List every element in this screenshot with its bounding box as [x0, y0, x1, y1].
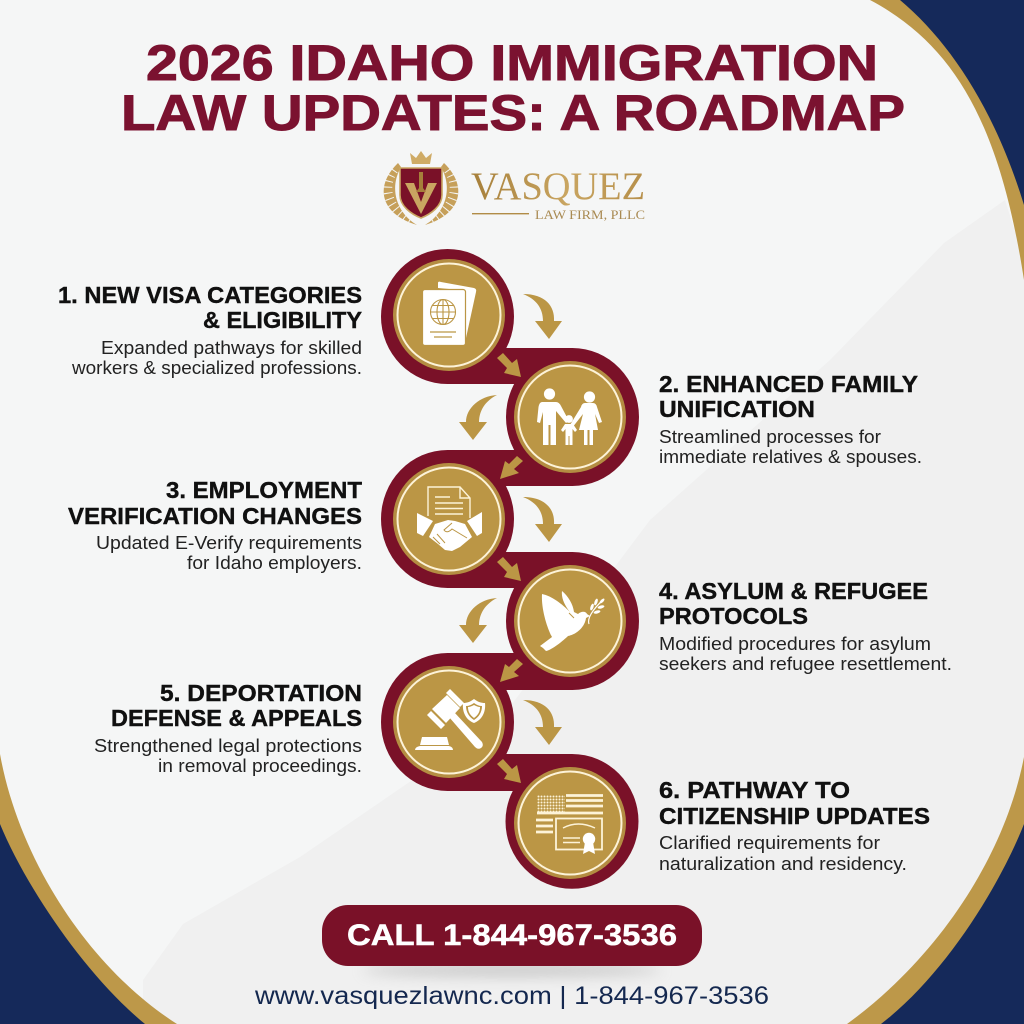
title: 2026 IDAHO IMMIGRATION [146, 34, 878, 91]
text block 4: 4. ASYLUM & REFUGEE [659, 578, 928, 604]
step 6 medallion: flag and certificate [514, 767, 626, 879]
text block 6 [659, 777, 930, 874]
step 3 medallion: document and handshake [393, 463, 505, 575]
text block 3: VERIFICATION CHANGES [68, 503, 362, 529]
text block 6: CITIZENSHIP UPDATES [659, 803, 930, 829]
text block 4: PROTOCOLS [659, 603, 808, 629]
text block 6: 6. PATHWAY TO [659, 777, 850, 803]
text block 4 [659, 578, 952, 674]
text block 2: immediate relatives & spouses. [659, 447, 922, 467]
text block 3: Updated E-Verify requirements [96, 533, 362, 553]
logo wordmark: VASQUEZ [471, 165, 645, 208]
text block 1: & ELIGIBILITY [203, 307, 362, 333]
arrow: curved right 2 [523, 497, 562, 542]
call to action button: CALL 1-844-967-3536 [347, 919, 677, 952]
step 2 medallion: family [514, 361, 626, 473]
text block 3 [68, 477, 363, 573]
button shadow [362, 964, 662, 976]
serpentine path [381, 249, 639, 889]
title: LAW UPDATES: A ROADMAP [121, 84, 905, 141]
arrow: curved left 1 [459, 395, 497, 440]
text block 1: 1. NEW VISA CATEGORIES [58, 282, 362, 308]
text block 2: Streamlined processes for [659, 427, 881, 447]
text block 2: 2. ENHANCED FAMILY [659, 371, 918, 397]
arrow: curved right 3 [523, 700, 562, 745]
step 4 medallion: dove [514, 565, 626, 677]
arrow: curved right 1 [523, 294, 562, 339]
text block 5 [94, 680, 362, 776]
text block 5: in removal proceedings. [158, 756, 362, 776]
text block 4: Modified procedures for asylum [659, 634, 931, 654]
step 5 medallion: gavel and shield [393, 666, 505, 778]
icon: shield [400, 168, 442, 218]
text block 3: 3. EMPLOYMENT [166, 477, 363, 503]
arrow: step 1 to 2 [497, 353, 521, 377]
title [121, 34, 905, 141]
text block 2: UNIFICATION [659, 396, 815, 422]
text block 5: Strengthened legal protections [94, 736, 362, 756]
logo: Vasquez Law Firm [384, 151, 645, 225]
arrows between steps [459, 294, 562, 783]
text block 3: for Idaho employers. [187, 553, 362, 573]
arrow: step 4 to 5 [500, 659, 523, 682]
call to action button [322, 905, 702, 966]
text block 5: 5. DEPORTATION [160, 680, 362, 706]
icon: crown [410, 151, 432, 164]
text block 6: Clarified requirements for [659, 833, 880, 853]
icon: laurel wreath [384, 163, 458, 225]
text block 6: naturalization and residency. [659, 854, 907, 874]
text block 1: Expanded pathways for skilled [101, 338, 362, 358]
text block 4: seekers and refugee resettlement. [659, 654, 952, 674]
arrow: curved left 2 [459, 598, 497, 643]
logo rule [472, 213, 529, 214]
text block 1 [58, 282, 362, 378]
text block 1: workers & specialized professions. [71, 358, 362, 378]
footer contact line: www.vasquezlawnc.com | 1-844-967-3536 [254, 982, 769, 1010]
arrow: step 2 to 3 [500, 456, 523, 479]
arrow: step 5 to 6 [497, 759, 521, 783]
step 1 medallion: passport [393, 259, 505, 371]
arrow: step 3 to 4 [497, 557, 521, 581]
logo subtitle: LAW FIRM, PLLC [535, 207, 645, 222]
text block 2 [659, 371, 922, 467]
text block 5: DEFENSE & APPEALS [111, 705, 362, 731]
